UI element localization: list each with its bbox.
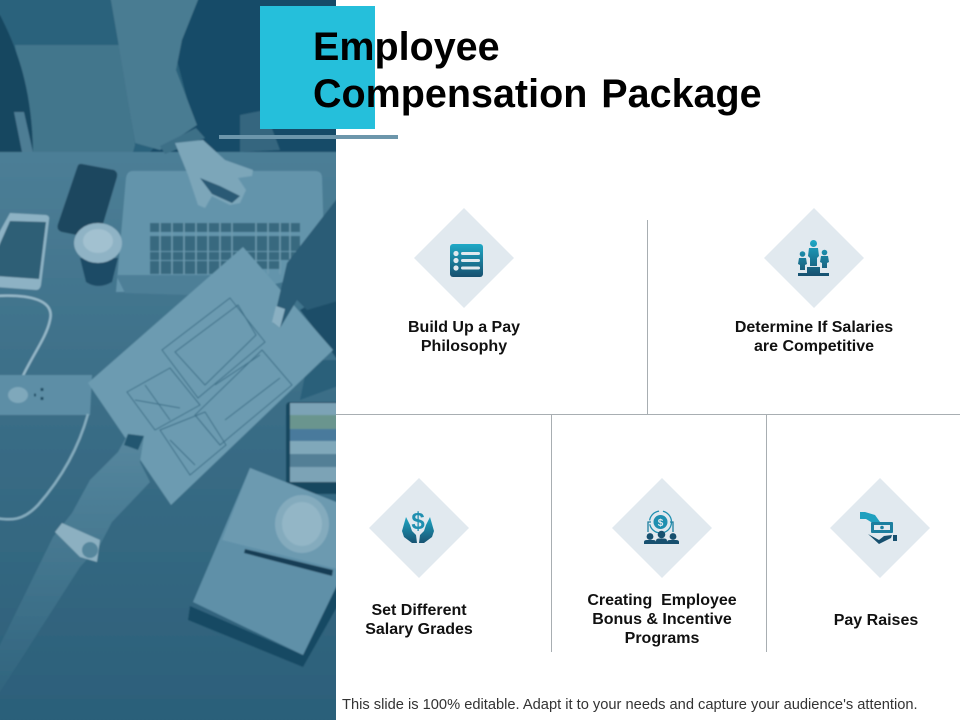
label: determine if salaries are competitive: [735, 319, 893, 355]
checklist icon: [450, 244, 483, 277]
label: creating employee bonus and incentive programs: Bonus & Incentive: [592, 611, 732, 628]
label: determine if salaries are competitive: Determine If Salaries: [735, 319, 893, 336]
title: [313, 25, 762, 116]
label: build up a pay philosophy: Build Up a Pay: [408, 319, 520, 336]
label: build up a pay philosophy: [408, 319, 520, 355]
diamond card: salary grades icon: [369, 478, 469, 578]
hands holding dollar icon: $: [411, 508, 425, 535]
footer note: This slide is 100% editable. Adapt it to your needs and capture your audience's attention.: [342, 697, 918, 713]
title underline bar: [219, 135, 398, 139]
label: creating employee bonus and incentive programs: [587, 592, 737, 647]
label: set different salary grades: Set Different: [371, 602, 467, 619]
label: set different salary grades: [365, 602, 473, 638]
diamond card: pay philosophy icon: [414, 208, 514, 308]
title: Compensation Package: [313, 72, 762, 116]
podium icon: [798, 240, 829, 276]
cyan accent square: [260, 6, 375, 129]
label: set different salary grades: Salary Grades: [365, 621, 473, 638]
label: determine if salaries are competitive: are Competitive: [754, 338, 874, 355]
people and coin icon: $: [658, 518, 664, 529]
diamond card: competitive salaries icon: [764, 208, 864, 308]
hand giving cash icon: [860, 512, 897, 544]
title: Employee: [313, 25, 500, 69]
label: creating employee bonus and incentive programs: Programs: [625, 630, 699, 647]
panel: duotone desk photo: [0, 0, 336, 720]
diamond card: bonus programs icon: [612, 478, 712, 578]
divider lines: [336, 220, 960, 652]
label: creating employee bonus and incentive programs: Creating Employee: [587, 592, 737, 609]
label: build up a pay philosophy: Philosophy: [421, 338, 507, 355]
label: pay raises: Pay Raises: [834, 612, 918, 629]
diamond card: pay raises icon: [830, 478, 930, 578]
